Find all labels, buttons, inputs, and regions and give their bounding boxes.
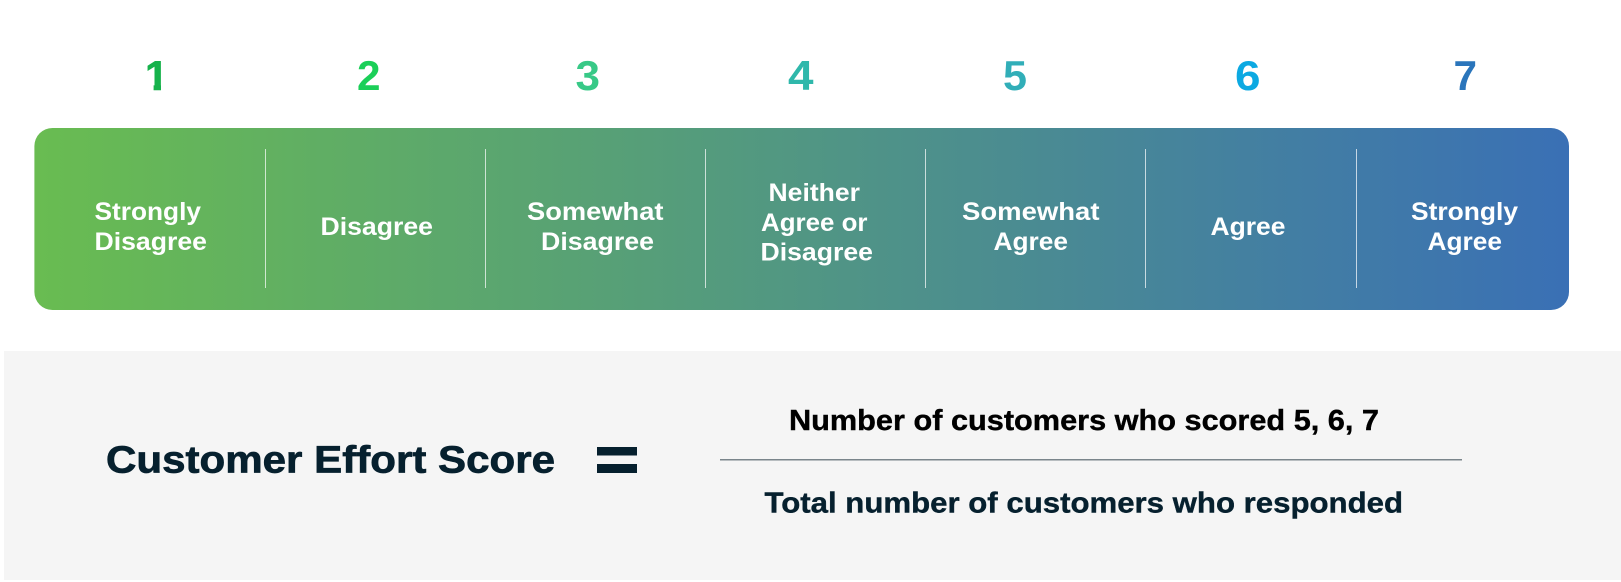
label: Somewhat Agree bbox=[962, 198, 1100, 256]
number 3: 3 bbox=[576, 52, 600, 99]
label: Strongly Agree: Strongly bbox=[1411, 198, 1518, 226]
label: Somewhat Agree: Agree bbox=[994, 228, 1068, 256]
label: Somewhat Disagree: Disagree bbox=[541, 228, 654, 256]
gradient bar bbox=[34, 128, 1569, 310]
number 4: 4 bbox=[788, 52, 814, 99]
denominator text: Total number of customers who responded bbox=[764, 488, 1403, 520]
numerator text: Number of customers who scored 5, 6, 7 bbox=[789, 405, 1379, 437]
label: Neither Agree or Disagree: Agree or bbox=[761, 209, 868, 237]
label: Disagree: Disagree bbox=[320, 213, 433, 241]
label: Neither Agree or Disagree: Neither bbox=[768, 179, 860, 207]
formula background bbox=[4, 351, 1621, 580]
label: Somewhat Disagree bbox=[527, 198, 664, 256]
heading: Customer Effort Score: Customer Effort Score bbox=[106, 440, 555, 482]
number 6: 6 bbox=[1235, 52, 1260, 99]
label: Strongly Disagree bbox=[94, 198, 207, 256]
label: Neither Agree or Disagree: Disagree bbox=[760, 238, 873, 266]
label: Agree: Agree bbox=[1210, 213, 1286, 241]
label: Strongly Agree: Agree bbox=[1428, 228, 1502, 256]
label: Somewhat Disagree: Somewhat bbox=[527, 198, 664, 226]
number 5: 5 bbox=[1003, 52, 1027, 99]
label: Strongly Disagree: Disagree bbox=[94, 228, 207, 256]
fraction line bbox=[720, 459, 1462, 460]
panel: gradient agreement scale bbox=[34, 128, 1569, 310]
label: Strongly Disagree: Strongly bbox=[94, 198, 201, 226]
number 7: 7 bbox=[1454, 52, 1477, 99]
score numbers bbox=[148, 60, 1476, 90]
number 2: 2 bbox=[357, 52, 380, 99]
label: Somewhat Agree: Somewhat bbox=[962, 198, 1100, 226]
panel: formula bbox=[4, 351, 1621, 580]
icon: equals sign bbox=[597, 447, 637, 473]
label: Strongly Agree bbox=[1411, 198, 1518, 256]
number 1: 1 bbox=[145, 52, 168, 99]
label: Neither Agree or Disagree bbox=[760, 179, 873, 266]
